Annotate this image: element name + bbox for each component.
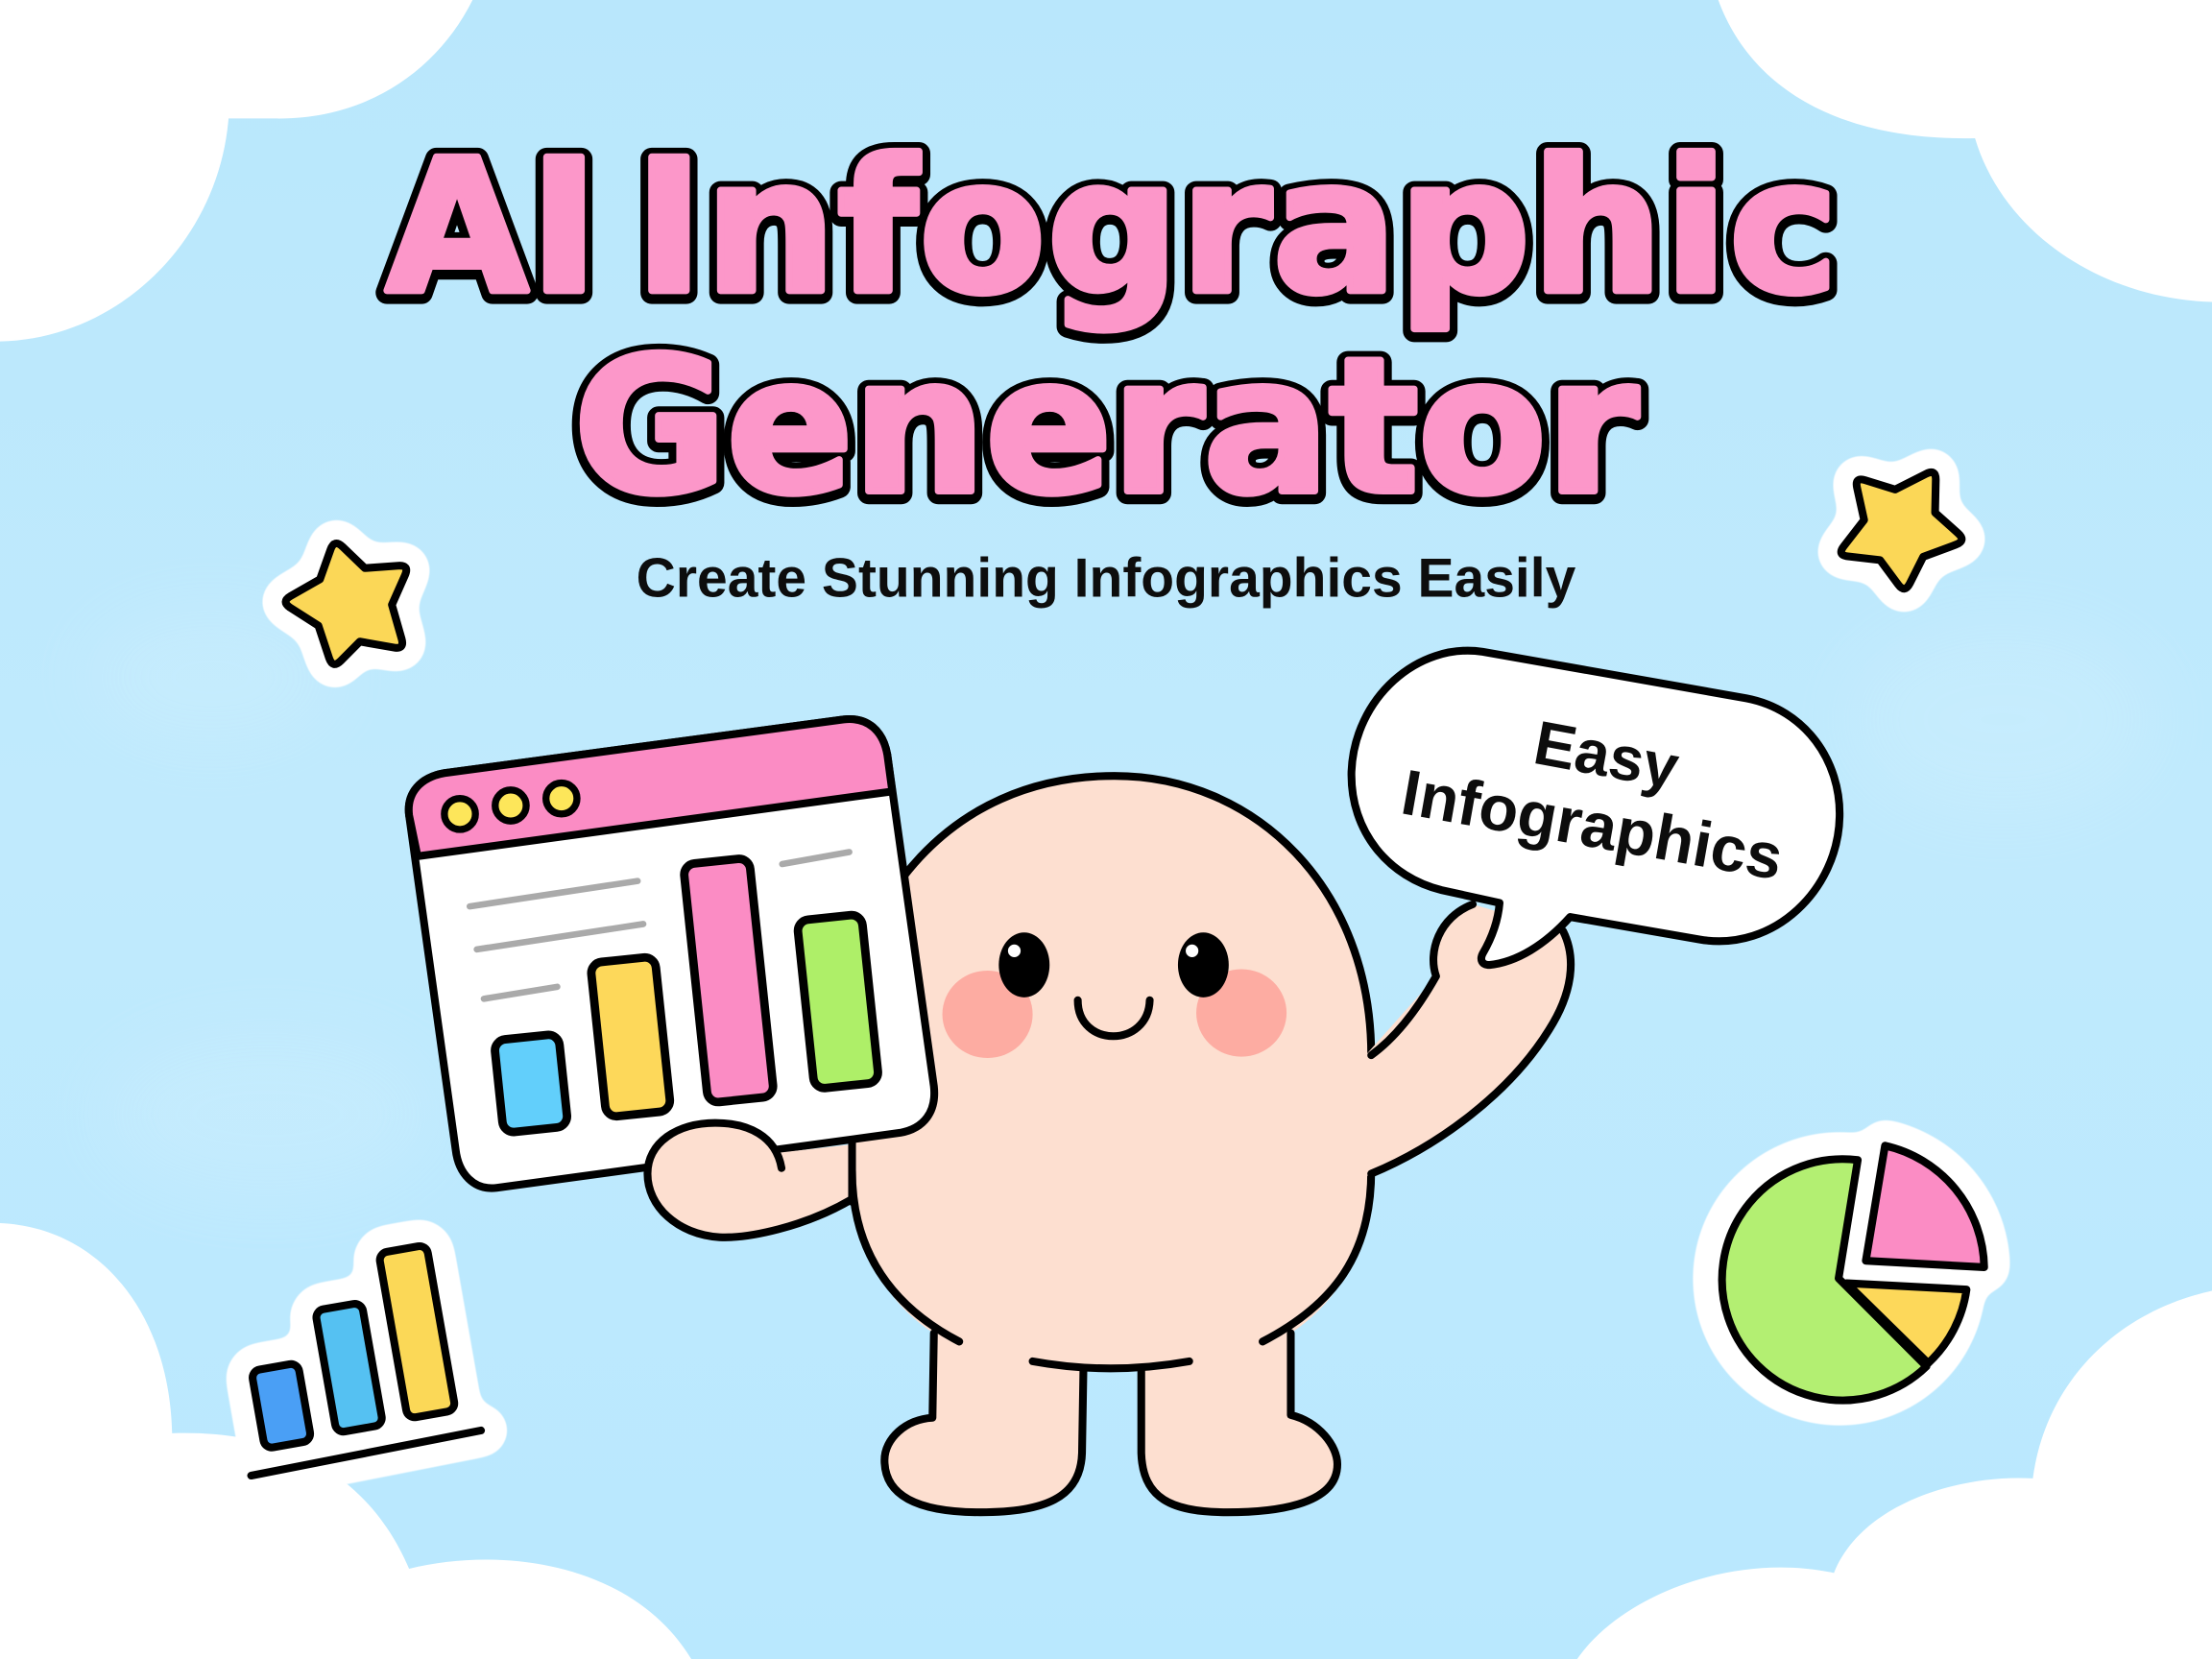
bubble text: Infographics: [1396, 757, 1788, 894]
subtitle: Create Stunning Infographics Easily: [637, 548, 1575, 610]
character face: [943, 932, 1286, 1058]
character body: [853, 776, 1371, 1512]
window dots: [445, 783, 577, 830]
text lines: [469, 853, 850, 998]
title: Generator: [574, 321, 1639, 538]
speech bubble: [1352, 651, 1839, 965]
faint background clouds: [84, 607, 2158, 1199]
chart bars: [493, 857, 879, 1133]
window title bar: [409, 719, 892, 856]
cloud: bottom left: [0, 1223, 691, 1659]
icon: bar chart sticker: [252, 1245, 481, 1476]
pie slice green: [1722, 1159, 1927, 1401]
cloud: top right: [1719, 0, 2212, 301]
icon: pie chart sticker: [1719, 1145, 1984, 1401]
title: AI Infographic: [386, 122, 1840, 335]
pie slice yellow: [1846, 1284, 1966, 1363]
pie slice pink: [1865, 1145, 1984, 1267]
title: [386, 122, 1840, 538]
small bars: [252, 1245, 456, 1449]
character left hand: [647, 1123, 854, 1238]
title: Generator: [574, 318, 1639, 535]
cloud: bottom right: [1577, 1290, 2212, 1659]
icon: star right: [1841, 472, 1961, 589]
baseline: [252, 1431, 481, 1476]
cloud: top left: [0, 0, 472, 342]
character right arm: [1365, 904, 1571, 1176]
title: AI Infographic: [386, 124, 1840, 337]
browser window with bar chart: [409, 719, 934, 1189]
icon: star left: [286, 543, 406, 664]
bubble text: Easy: [1528, 707, 1684, 803]
